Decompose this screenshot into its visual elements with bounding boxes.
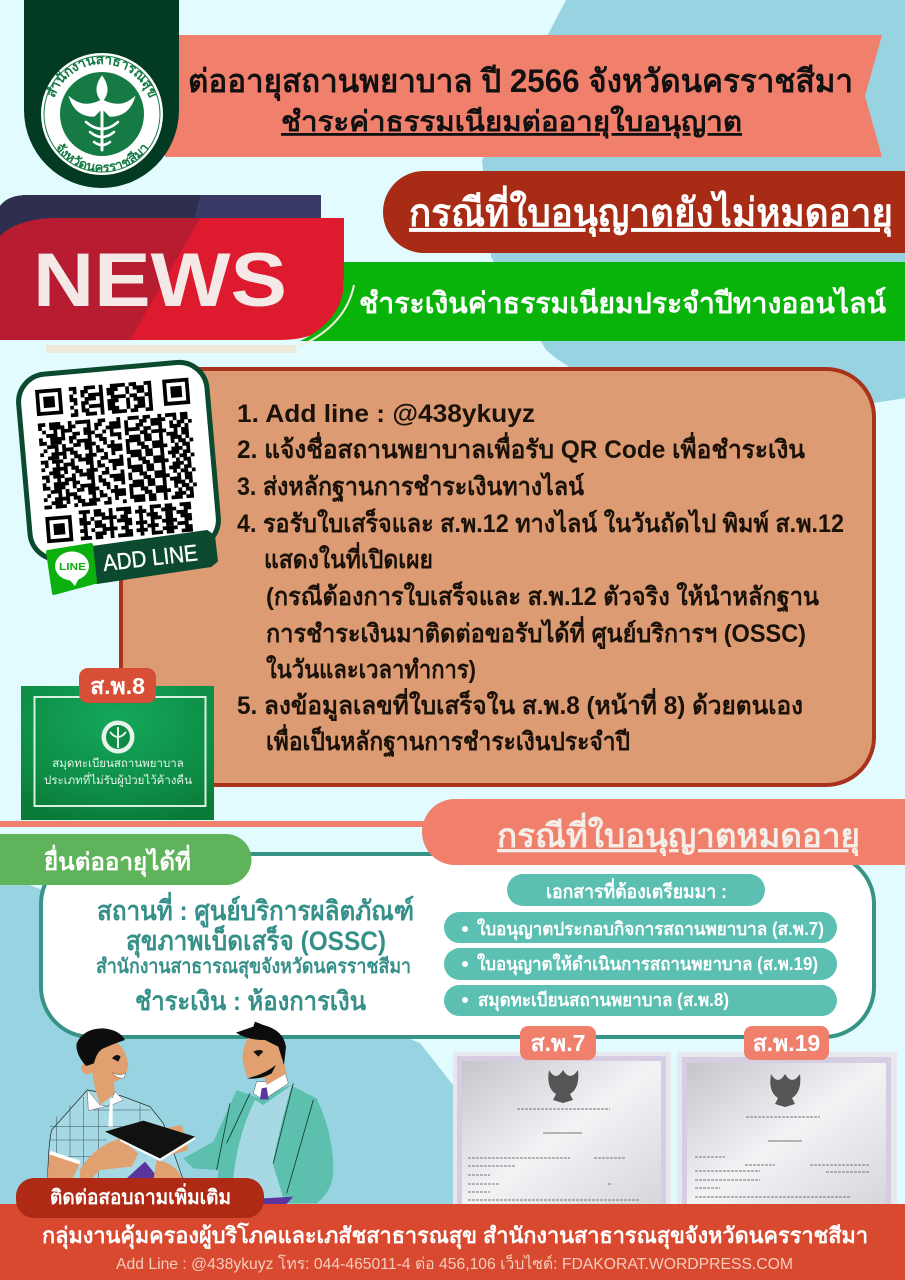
contact pill text: ติดต่อสอบถามเพิ่มเติม (50, 1182, 231, 1209)
QR card (16, 360, 221, 593)
heading text: กรณีที่ใบอนุญาตหมดอายุ (497, 812, 860, 857)
heading: pay online: ชำระเงินค่าธรรมเนียมประจำปีทางออนไลน์ (359, 286, 886, 320)
logo shield (24, 0, 179, 188)
pill: renew at (0, 834, 252, 885)
QR code (35, 380, 200, 541)
pill text: ยื่นต่ออายุได้ที่ (44, 844, 191, 878)
step 4 continued: แสดงในที่เปิดเผย (264, 542, 433, 574)
footer contact details: Add Line : @438ykuyz โทร: 044-465011-4 ต่อ 456,106 เว็บไซต์: FDAKORAT.WORDPRESS.COM (116, 1253, 793, 1273)
icon: garuda (770, 1074, 800, 1107)
book (105, 1121, 195, 1160)
green payment bar (300, 262, 905, 346)
payment room: ชำระเงิน : ห้องการเงิน (135, 986, 366, 1016)
document: sor por 8 green book (21, 686, 214, 820)
item 3 text: สมุดทะเบียนสถานพยาบาล (ส.พ.8) (478, 990, 729, 1012)
footer title: กลุ่มงานคุ้มครองผู้บริโภคและเภสัชสาธารณสุข สำนักงานสาธารณสุขจังหวัดนครราชสีมา (42, 1222, 868, 1250)
documents heading pill (507, 874, 765, 906)
news ribbon (0, 195, 344, 340)
document item 1 (444, 912, 837, 943)
documents heading: เอกสารที่ต้องเตรียมมา : (546, 878, 727, 903)
badge: sor por 8 (79, 668, 156, 703)
location line 2: สุขภาพเบ็ดเสร็จ (OSSC) (126, 923, 386, 958)
background shape: lower left blue (0, 885, 480, 1210)
panel: online payment steps (121, 369, 874, 785)
step 1: 1. Add line : @438ykuyz (237, 400, 535, 428)
badge: sor por 7 (520, 1026, 596, 1060)
logo ring text top: สำนักงานสาธารณสุข (46, 56, 156, 98)
step 5 continued: เพื่อเป็นหลักฐานการชำระเงินประจำปี (266, 724, 630, 758)
man left (48, 1028, 188, 1180)
icon: LINE logo (48, 545, 95, 593)
badge text: ส.พ.7 (531, 1030, 585, 1056)
location line 3: สำนักงานสาธารณสุขจังหวัดนครราชสีมา (96, 955, 411, 979)
add line label: ADD LINE (102, 539, 199, 576)
title line 1: ต่ออายุสถานพยาบาล ปี 2566 จังหวัดนครราชสีมา (188, 63, 853, 102)
badge: sor por 19 (744, 1026, 829, 1060)
step 4: 4. รอรับใบเสร็จและ ส.พ.12 ทางไลน์ ในวันถัดไป พิมพ์ ส.พ.12 (237, 508, 844, 538)
NEWS text: NEWS (33, 238, 287, 323)
step 2: 2. แจ้งชื่อสถานพยาบาลเพื่อรับ QR Code เพื่อชำระเงิน (237, 432, 805, 464)
badge text: ส.พ.19 (753, 1030, 820, 1056)
footer (0, 1204, 905, 1280)
item 2 text: ใบอนุญาตให้ดำเนินการสถานพยาบาล (ส.พ.19) (477, 953, 818, 976)
step 4 note line 3: ในวันและเวลาทำการ) (266, 654, 476, 684)
document: sor por 7 certificate (453, 1052, 671, 1208)
logo ring text bottom: จังหวัดนครราชสีมา (57, 144, 149, 172)
man right (183, 1022, 333, 1204)
heading pill: license expired (422, 799, 905, 865)
step 3: 3. ส่งหลักฐานการชำระเงินทางไลน์ (237, 471, 584, 503)
panel: where to renew (41, 854, 874, 1037)
document: sor por 19 certificate (677, 1052, 897, 1208)
background shape: top right blue (482, 0, 905, 408)
book title line 2: ประเภทที่ไม่รับผู้ป่วยไว้ค้างคืน (44, 772, 192, 787)
step 4 note line 2: การชำระเงินมาติดต่อขอรับได้ที่ ศูนย์บริการฯ (OSSC) (266, 616, 806, 650)
step 4 note line 1: (กรณีต้องการใบเสร็จและ ส.พ.12 ตัวจริง ให้นำหลักฐาน (266, 581, 819, 613)
title line 2: ชำระค่าธรรมเนียมต่ออายุใบอนุญาต (281, 105, 742, 139)
book title line 1: สมุดทะเบียนสถานพยาบาล (52, 757, 184, 770)
badge text: ส.พ.8 (90, 673, 145, 699)
red heading pill (383, 171, 905, 253)
icon: garuda (548, 1070, 578, 1103)
LINE logo text: LINE (59, 562, 86, 573)
illustration: two men with a book (48, 1022, 333, 1204)
contact pill (16, 1178, 264, 1218)
icon: caduceus (70, 78, 134, 150)
add line band (92, 531, 217, 583)
step 5: 5. ลงข้อมูลเลขที่ใบเสร็จใน ส.พ.8 (หน้าที่ 8) ด้วยตนเอง (237, 688, 803, 722)
item 1 text: ใบอนุญาตประกอบกิจการสถานพยาบาล (ส.พ.7) (477, 918, 824, 941)
title banner (165, 35, 882, 157)
location line 1: สถานที่ : ศูนย์บริการผลิตภัณฑ์ (97, 891, 414, 928)
document item 3 (444, 985, 837, 1016)
document item 2 (444, 948, 837, 980)
